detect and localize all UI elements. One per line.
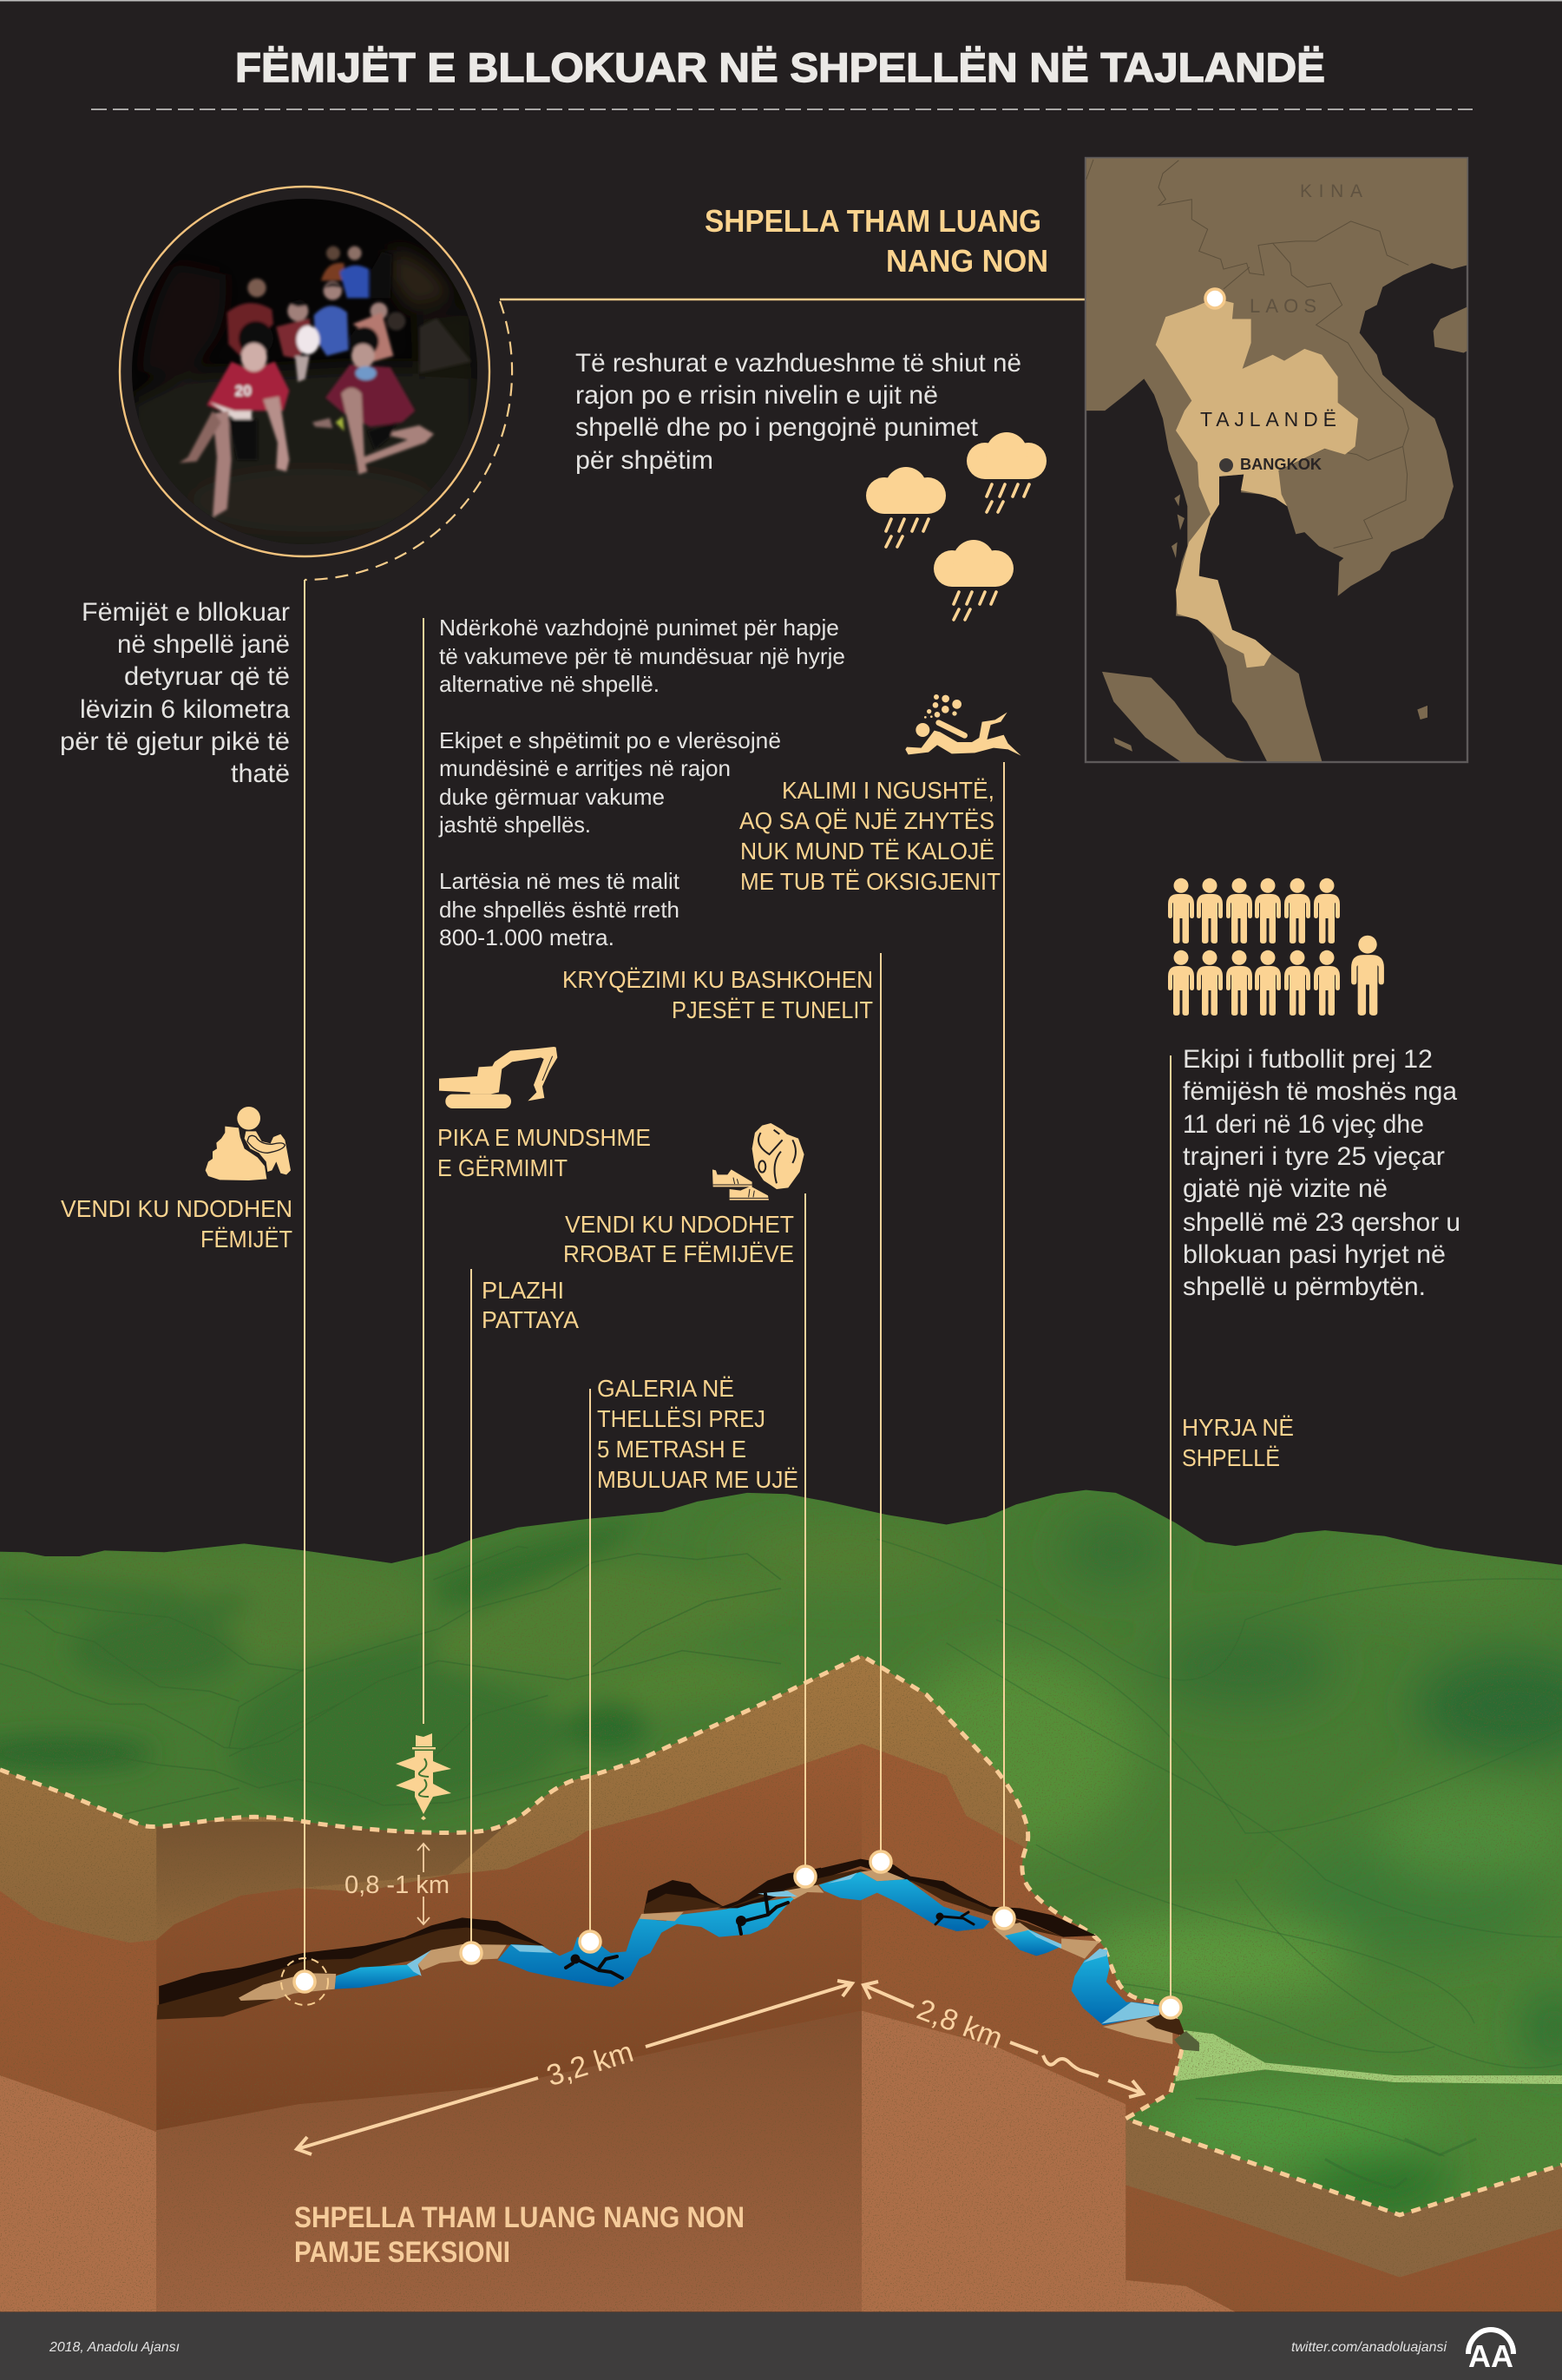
label: where the children are [61, 1195, 292, 1252]
label: section title: PAMJE SEKSIONI [294, 2236, 510, 2269]
label: narrow passage: ME TUB TË OKSIGJENIT [740, 868, 1001, 895]
label: narrow passage: AQ SA QË NJË ZHYTËS [739, 807, 994, 834]
label: possible drilling point: E GËRMIMIT [437, 1154, 568, 1181]
text: drilling work: mundësinë e arritjes në rajon [439, 755, 731, 781]
text: football team: shpellë u përmbytën. [1183, 1272, 1426, 1301]
text: children moved 6 km: detyruar që të [124, 662, 290, 691]
text: drilling work: duke gërmuar vakume [439, 784, 665, 810]
boy left [207, 362, 289, 417]
footer: twitter.com/anadoluajansi [1291, 2340, 1447, 2355]
map labels: BANGKOK [1240, 456, 1322, 473]
label: junction [562, 966, 873, 1023]
photo: trapped children in the cave: 20 [235, 382, 252, 399]
label: section title [294, 2201, 745, 2269]
cave tunnel: east part [718, 1859, 1199, 2051]
icon: drill [396, 1733, 451, 1820]
label: cave entrance: HYRJA NË [1182, 1414, 1294, 1441]
label: narrow passage [739, 777, 1001, 895]
text: drilling work [438, 615, 845, 950]
heading: cave name: NANG NON [886, 243, 1048, 279]
map marker [1205, 289, 1224, 308]
dimension: 2.8 km: 2,8 km [913, 1993, 1007, 2055]
dimension: 3.2 km: 3,2 km [543, 2035, 637, 2093]
text: football team: trajneri i tyre 25 vjeçar [1183, 1142, 1445, 1171]
leader lines to the cave [305, 580, 1171, 2008]
light [297, 325, 319, 354]
dimension: 3.2 km [297, 1981, 852, 2154]
text: children moved 6 km: në shpellë janë [117, 630, 290, 659]
text: rain: për shpëtim [575, 446, 713, 475]
label: junction: KRYQËZIMI KU BASHKOHEN [562, 966, 873, 993]
text: football team: fëmijësh të moshës nga [1183, 1077, 1457, 1106]
boy right [325, 365, 415, 427]
leader: dashed arc from photo and solid line to map [305, 299, 1215, 580]
map labels: KINA [1300, 181, 1362, 201]
text: drilling work: Ndërkohë vazhdojnë punimet për hapje [439, 615, 839, 641]
text: drilling work: 800-1.000 metra. [439, 924, 614, 950]
heading: cave name [705, 203, 1048, 279]
icon: diver [905, 694, 1021, 756]
label: flooded gallery: 5 METRASH E [597, 1436, 746, 1463]
text: drilling work: Ekipet e shpëtimit po e vlerësojnë [439, 727, 781, 753]
dimension: depth 0.8-1 km: 0,8 -1 km [345, 1871, 450, 1899]
text: football team [1183, 1045, 1460, 1301]
text: football team: shpellë më 23 qershor u [1183, 1208, 1460, 1237]
label: narrow passage: KALIMI I NGUSHTË, [782, 777, 994, 804]
map labels: LAOS [1250, 295, 1316, 317]
label: clothes location: VENDI KU NDODHET [565, 1211, 794, 1238]
text: children moved 6 km: për të gjetur pikë të [60, 727, 290, 756]
text: children moved 6 km: lëvizin 6 kilometra [80, 695, 290, 724]
text: drilling work: Lartësia në mes të malit [439, 868, 680, 894]
map labels [1200, 181, 1362, 473]
back row [326, 247, 340, 260]
cave tunnel: west part [157, 1868, 824, 2020]
text: drilling work: alternative në shpellë. [439, 671, 660, 697]
land [1086, 158, 1467, 761]
label: flooded gallery: GALERIA NË [597, 1375, 734, 1402]
photo: trapped children in the cave [120, 187, 489, 556]
terrain: soil cross-section [0, 1493, 1562, 2312]
text: rain: Të reshurat e vazhdueshme të shiut në [575, 349, 1021, 378]
label: Pattaya beach: PLAZHI [482, 1277, 564, 1304]
dimension: 2.8 km [863, 1982, 1143, 2097]
label: possible drilling point: PIKA E MUNDSHME [437, 1124, 651, 1151]
text: drilling work: jashtë shpellës. [438, 812, 591, 838]
label: where the children are: FËMIJËT [200, 1226, 292, 1252]
text: children moved 6 km: Fëmijët e bllokuar [82, 598, 290, 627]
text: drilling work: të vakumeve për të mundësuar një hyrje [439, 643, 845, 669]
label: clothes location [563, 1211, 794, 1267]
text: rain [575, 349, 1021, 475]
text: rain: rajon po e rrisin nivelin e ujit në [575, 381, 938, 410]
text: children moved 6 km [60, 598, 290, 788]
text: football team: bllokuan pasi hyrjet në [1183, 1240, 1446, 1269]
label: section title: SHPELLA THAM LUANG NANG NON [294, 2201, 745, 2234]
dashed surface edge [0, 1655, 1562, 2215]
label: flooded gallery: THELLËSI PREJ [597, 1405, 765, 1432]
label: narrow passage: NUK MUND TË KALOJË [740, 838, 994, 865]
label: cave entrance: SHPELLË [1182, 1444, 1280, 1471]
icons: divers in water [566, 1894, 974, 1978]
icon: agency logo: AA [1468, 2338, 1513, 2374]
text: drilling work: dhe shpellës është rreth [439, 897, 679, 923]
label: Pattaya beach: PATTAYA [482, 1306, 579, 1333]
heading: cave name: SHPELLA THAM LUANG [705, 203, 1041, 239]
title: FËMIJËT E BLLOKUAR NË SHPELLËN NË TAJLANDË [235, 44, 1325, 90]
label: junction: PJESËT E TUNELIT [672, 996, 873, 1023]
text: football team: gjatë një vizite në [1183, 1174, 1388, 1203]
label: flooded gallery: MBULUAR ME UJË [597, 1466, 798, 1493]
text: children moved 6 km: thatë [231, 759, 290, 788]
text: rain: shpellë dhe po i pengojnë punimet [575, 413, 979, 442]
text: football team: Ekipi i futbollit prej 12 [1183, 1045, 1433, 1074]
markers on the cave [281, 1851, 1181, 2018]
icon: backpack and shoes [712, 1123, 804, 1200]
icon: excavator [439, 1047, 557, 1108]
terrain speckle [0, 1493, 1562, 2312]
dimension: depth 0.8-1 km [345, 1844, 450, 1924]
Thailand [1156, 299, 1358, 667]
contour lines [0, 1547, 781, 1814]
left side ridges [0, 1515, 781, 1825]
label: possible drilling point [437, 1124, 651, 1181]
river [1176, 2029, 1562, 2084]
footer [0, 2312, 1562, 2380]
text: football team: 11 deri në 16 vjeç dhe [1183, 1110, 1424, 1139]
map: Thailand and region [1086, 158, 1467, 763]
label: flooded gallery [597, 1375, 798, 1493]
icons: rain clouds [866, 432, 1047, 620]
label: cave entrance [1182, 1414, 1294, 1471]
label: clothes location: RROBAT E FËMIJËVE [563, 1240, 794, 1267]
right side shading [727, 1516, 1562, 2211]
map labels: TAJLANDË [1200, 408, 1336, 431]
icon: 12 children and coach [1168, 878, 1384, 1016]
terrain: green mountain surface [0, 1489, 1562, 2213]
borders [1086, 160, 1408, 548]
label: Pattaya beach [482, 1277, 579, 1333]
icon: sitting child [206, 1107, 291, 1180]
footer: 2018, Anadolu Ajansı [49, 2340, 180, 2355]
label: where the children are: VENDI KU NDODHEN [61, 1195, 292, 1222]
